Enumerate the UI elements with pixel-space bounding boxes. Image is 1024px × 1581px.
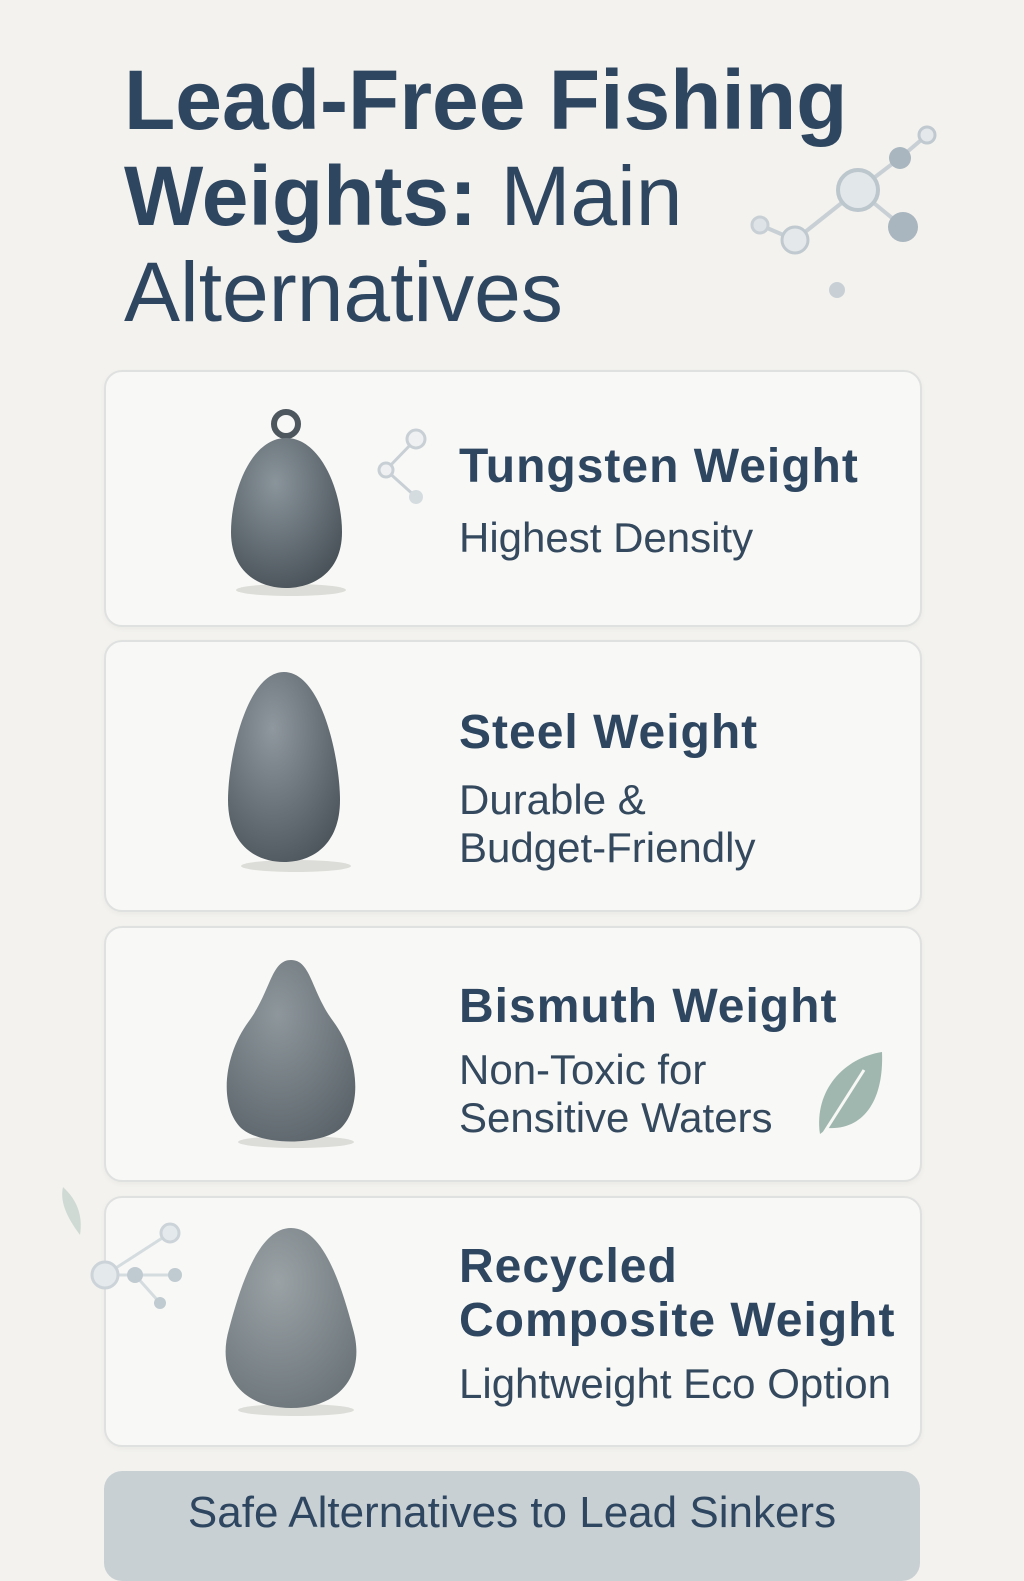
- text: composite: Composite Weight: [459, 1294, 895, 1347]
- icon: steel weight: [228, 672, 351, 872]
- icon: tungsten weight: [231, 409, 346, 596]
- text: tungsten: Tungsten Weight: [459, 440, 859, 493]
- panel: bismuth: [104, 926, 922, 1182]
- icon: leaf: [819, 1052, 882, 1134]
- panel: steel: Durable &: [459, 776, 646, 823]
- panel: bismuth: Non-Toxic for: [459, 1046, 706, 1093]
- panel: recycled composite: [104, 1196, 922, 1447]
- footer banner: Safe Alternatives to Lead Sinkers: [188, 1488, 836, 1537]
- panel: tungsten: [104, 370, 922, 627]
- title: Lead-Free Fishing: [124, 53, 847, 147]
- icon: bismuth weight: [226, 960, 356, 1148]
- panel: steel: [104, 640, 922, 912]
- title: Weights: Main: [124, 149, 683, 243]
- text: composite: Recycled: [459, 1240, 678, 1293]
- panel: recycled composite: Lightweight Eco Option: [459, 1360, 891, 1407]
- panel: steel: Budget-Friendly: [459, 824, 755, 871]
- icon: molecule and leaf left: [62, 1187, 182, 1309]
- text: composite: [459, 1240, 895, 1347]
- title: [124, 53, 847, 339]
- icon: composite weight: [226, 1228, 356, 1416]
- panel: bismuth: Sensitive Waters: [459, 1094, 773, 1141]
- icon: small molecule: [378, 428, 426, 504]
- footer banner: [104, 1471, 920, 1581]
- text: steel: Steel Weight: [459, 706, 758, 759]
- icon: molecule top right: [750, 126, 936, 298]
- text: bismuth: Bismuth Weight: [459, 980, 837, 1033]
- panel: tungsten: Highest Density: [459, 514, 753, 561]
- title: Alternatives: [124, 245, 563, 339]
